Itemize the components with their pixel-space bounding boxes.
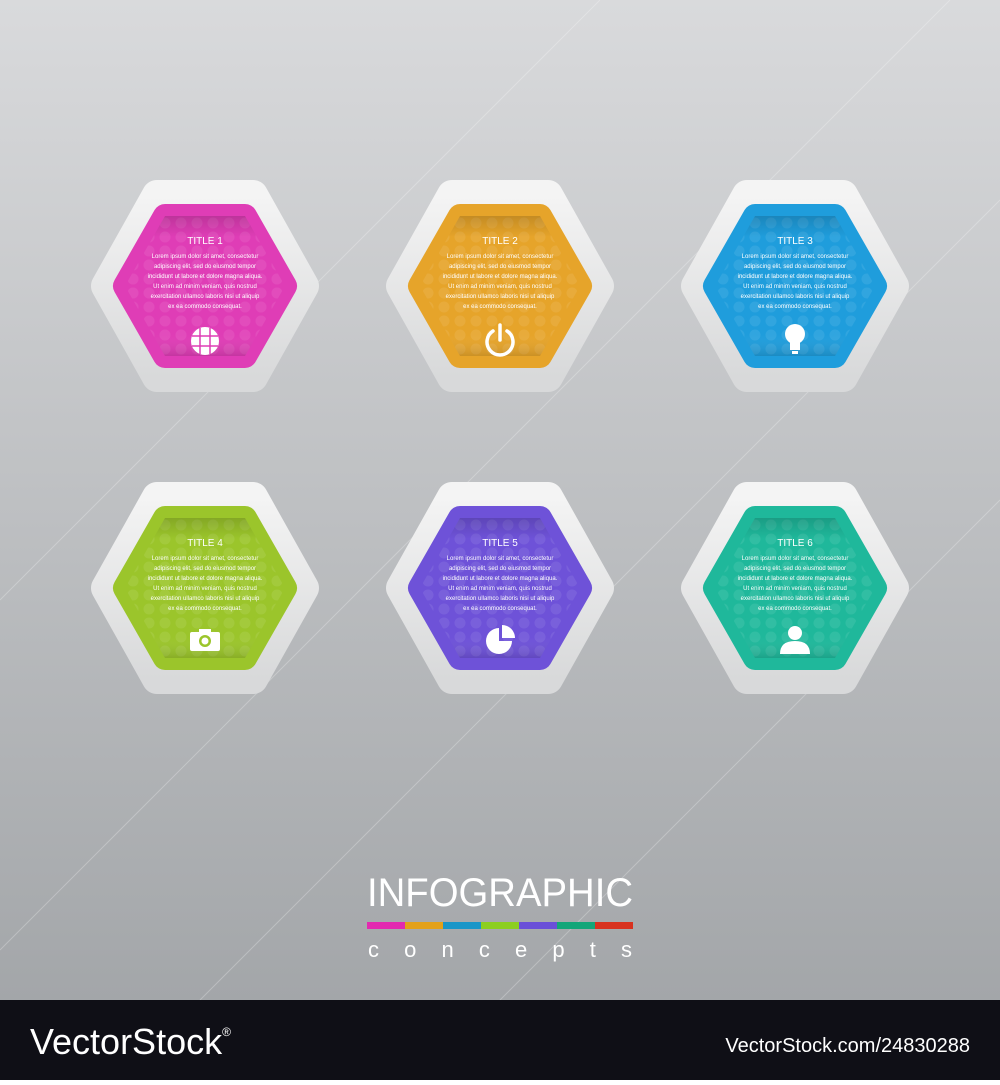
footer bar [0,1000,1000,1080]
icon: bulb [785,324,805,354]
card 2: incididunt ut labore et dolore magna aliqua. [443,274,558,280]
card 6: Ut enim ad minim veniam, quis nostrud [743,586,847,592]
card 6: TITLE 6 [777,538,813,549]
title: INFOGRAPHIC [367,871,633,915]
card 2: adipiscing elit, sed do eiusmod tempor [449,264,551,270]
card 5: exercitation ullamco laboris nisi ut aliquip [446,596,555,602]
title [367,871,633,962]
title: concepts [368,937,632,962]
card 4: ex ea commodo consequat. [168,606,242,612]
color bar [367,922,633,929]
icon: power [487,325,513,355]
card 1: exercitation ullamco laboris nisi ut aliquip [151,294,260,300]
card 3: ex ea commodo consequat. [758,304,832,310]
card 2: Ut enim ad minim veniam, quis nostrud [448,284,552,290]
card 1: Lorem ipsum dolor sit amet, consectetur [152,254,258,260]
card 3: adipiscing elit, sed do eiusmod tempor [744,264,846,270]
icon: user [780,626,810,654]
card 1 [106,195,304,377]
card 4: incididunt ut labore et dolore magna aliqua. [148,576,263,582]
card 4: exercitation ullamco laboris nisi ut aliquip [151,596,260,602]
footer bar: ® [222,1025,231,1039]
card 5: adipiscing elit, sed do eiusmod tempor [449,566,551,572]
card 5: incididunt ut labore et dolore magna aliqua. [443,576,558,582]
card 1: adipiscing elit, sed do eiusmod tempor [154,264,256,270]
card 4 [106,497,304,679]
card 5: Lorem ipsum dolor sit amet, consectetur [447,556,553,562]
card 4: Lorem ipsum dolor sit amet, consectetur [152,556,258,562]
card 4: TITLE 4 [187,538,223,549]
card 5: TITLE 5 [482,538,518,549]
card 3: incididunt ut labore et dolore magna aliqua. [738,274,853,280]
card 3 [696,195,894,377]
icon: globe [192,328,218,354]
card 5: ex ea commodo consequat. [463,606,537,612]
card 3: exercitation ullamco laboris nisi ut aliquip [741,294,850,300]
card 1: TITLE 1 [187,236,223,247]
card 4: Ut enim ad minim veniam, quis nostrud [153,586,257,592]
card 2: Lorem ipsum dolor sit amet, consectetur [447,254,553,260]
card 6: incididunt ut labore et dolore magna aliqua. [738,576,853,582]
card 1: Ut enim ad minim veniam, quis nostrud [153,284,257,290]
footer bar: VectorStock.com/24830288 [725,1035,970,1057]
card 2: ex ea commodo consequat. [463,304,537,310]
footer bar: VectorStock [30,1021,222,1062]
card 3: Lorem ipsum dolor sit amet, consectetur [742,254,848,260]
card 6: Lorem ipsum dolor sit amet, consectetur [742,556,848,562]
card 1: ex ea commodo consequat. [168,304,242,310]
card 2: exercitation ullamco laboris nisi ut aliquip [446,294,555,300]
card 4: adipiscing elit, sed do eiusmod tempor [154,566,256,572]
icon: camera [190,629,220,651]
card 3: TITLE 3 [777,236,813,247]
icon: pie chart [486,625,515,654]
card 3: Ut enim ad minim veniam, quis nostrud [743,284,847,290]
card 6 [696,497,894,679]
card 5 [401,497,599,679]
card 1: incididunt ut labore et dolore magna aliqua. [148,274,263,280]
card 2 [401,195,599,377]
card 6: adipiscing elit, sed do eiusmod tempor [744,566,846,572]
card 6: exercitation ullamco laboris nisi ut aliquip [741,596,850,602]
card 6: ex ea commodo consequat. [758,606,832,612]
card 2: TITLE 2 [482,236,518,247]
card 5: Ut enim ad minim veniam, quis nostrud [448,586,552,592]
